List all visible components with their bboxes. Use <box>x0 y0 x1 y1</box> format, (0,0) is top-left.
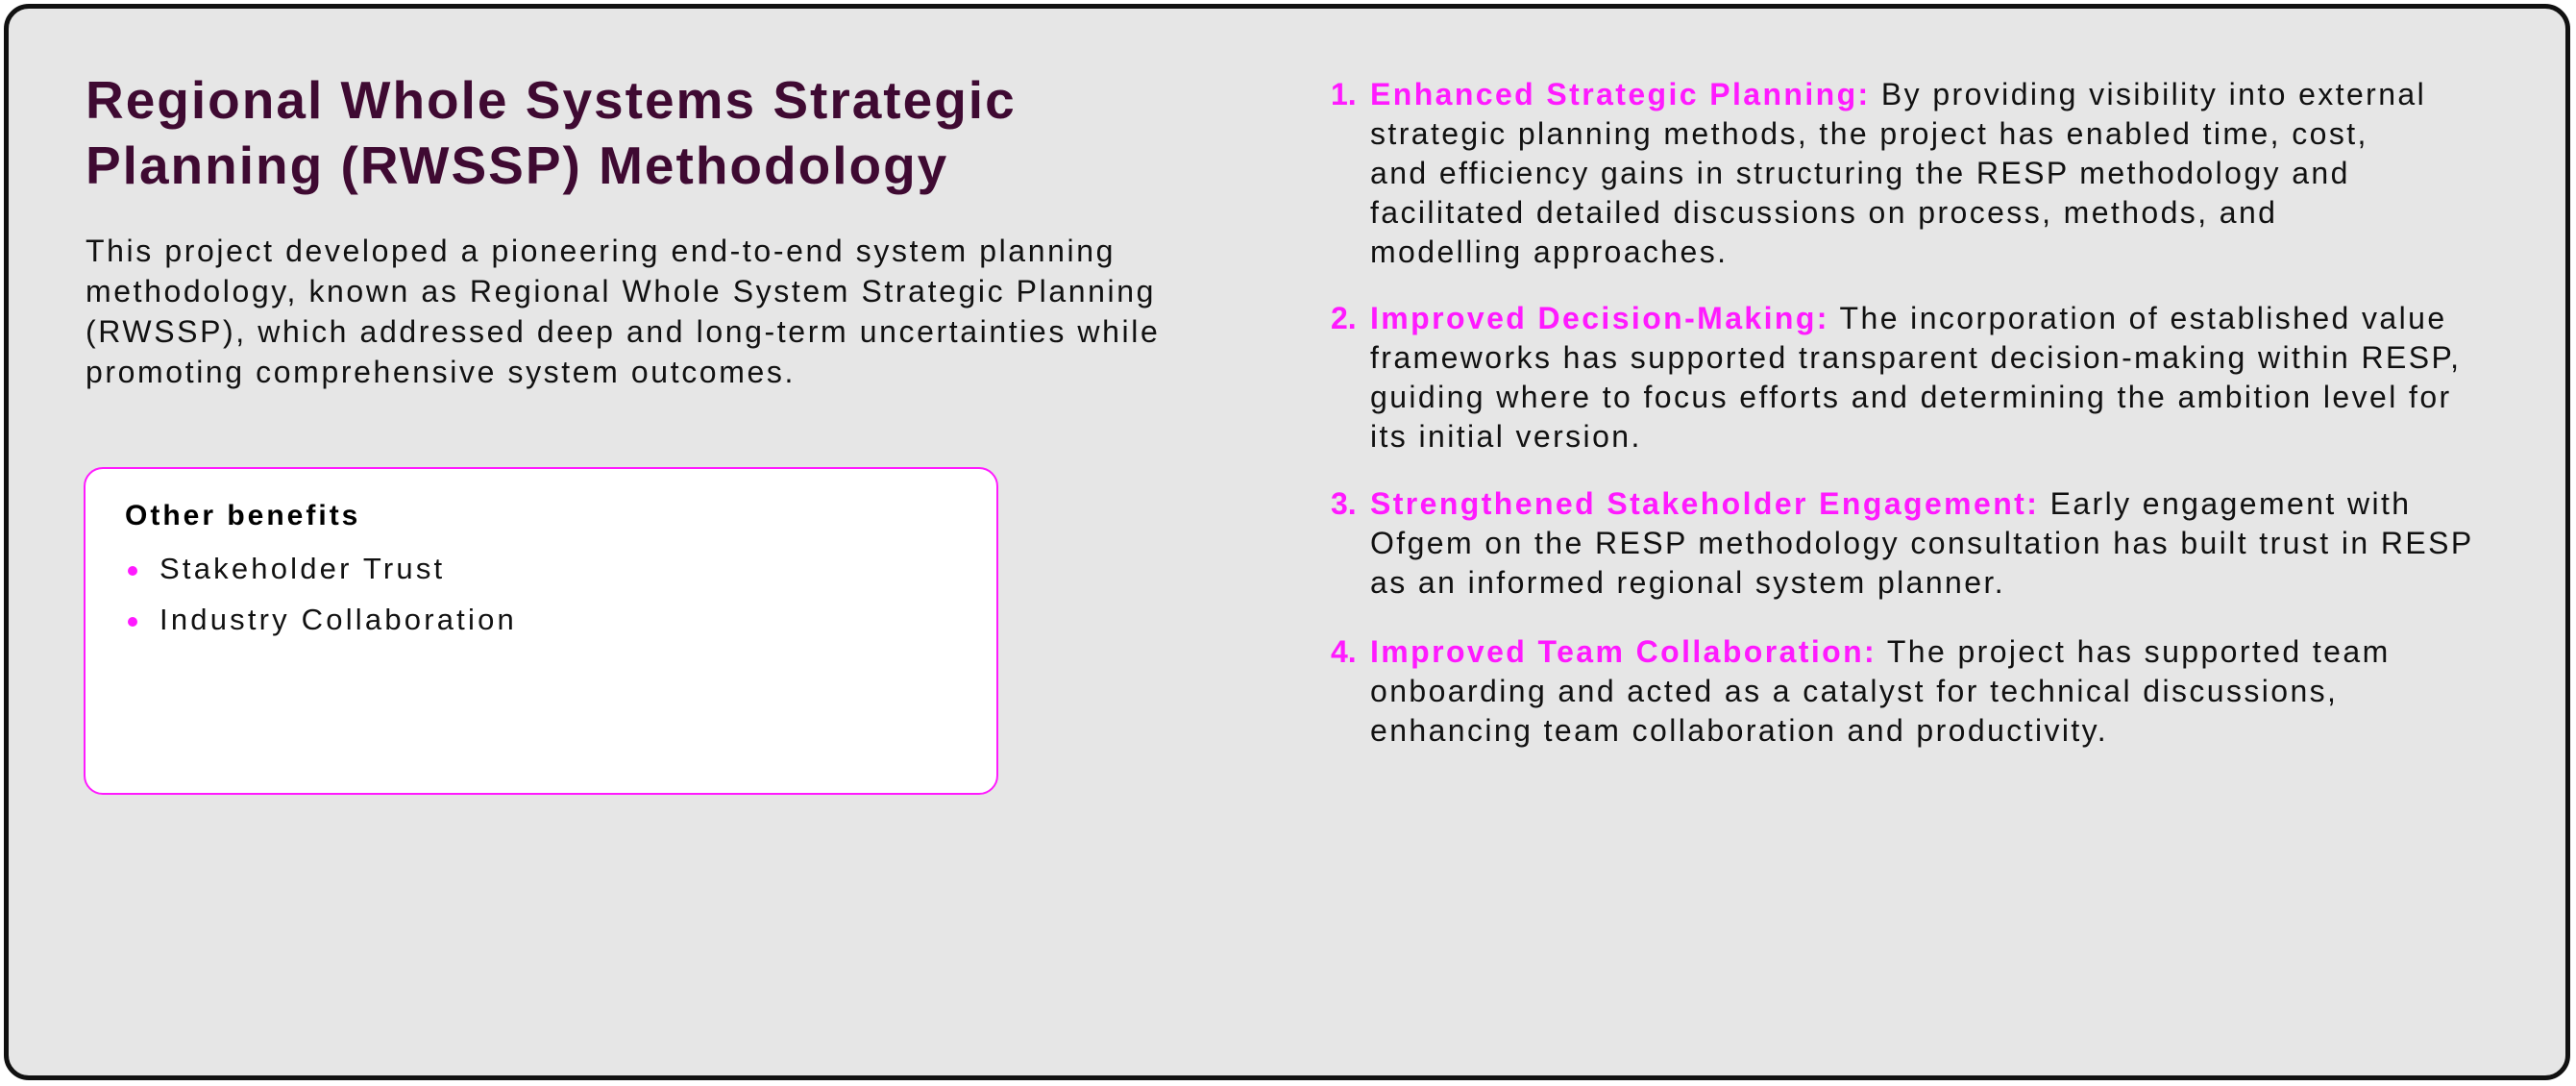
text block: intro: methodology, known as Regional Whole System Strategic Planning <box>86 274 1156 309</box>
list item 2: guiding where to focus efforts and determining the ambition level for <box>1370 380 2452 414</box>
bullet: industry collaboration <box>128 603 517 636</box>
list item 4: onboarding and acted as a catalyst for technical discussions, <box>1370 674 2338 708</box>
panel: other benefits <box>84 467 998 795</box>
list item 3: as an informed regional system planner. <box>1370 565 2005 600</box>
list item 4: enhancing team collaboration and productivity. <box>1370 713 2108 748</box>
text block: intro: promoting comprehensive system outcomes. <box>86 355 796 389</box>
text block: intro: (RWSSP), which addressed deep and long-term uncertainties while <box>86 314 1160 349</box>
list item 1: and efficiency gains in structuring the RESP methodology and <box>1370 156 2350 190</box>
list item 2: Improved Decision-Making: The incorporation of established value <box>1370 301 2447 335</box>
list item 2: its initial version. <box>1370 419 1642 454</box>
bullet: stakeholder trust <box>128 552 445 585</box>
text block: intro <box>86 234 1160 389</box>
panel: other benefits: Stakeholder Trust <box>159 552 445 585</box>
list item 1: strategic planning methods, the project has enabled time, cost, <box>1370 116 2368 151</box>
list item 3 <box>1331 486 2474 600</box>
list item 2: frameworks has supported transparent decision-making within RESP, <box>1370 340 2461 375</box>
heading: other benefits: Other benefits <box>125 500 360 531</box>
list item 4: Improved Team Collaboration: The project has supported team <box>1370 634 2391 669</box>
list item 4: 4. <box>1331 634 1357 669</box>
list item 1: Enhanced Strategic Planning: By providing visibility into external <box>1370 77 2426 111</box>
title: Planning (RWSSP) Methodology <box>86 136 948 195</box>
list item 2 <box>1331 301 2461 454</box>
list item 3: 3. <box>1331 486 1357 521</box>
list item 2: 2. <box>1331 301 1357 335</box>
list item 3: Ofgem on the RESP methodology consultation has built trust in RESP <box>1370 526 2474 560</box>
list item 4 <box>1331 634 2391 748</box>
list item 1: facilitated detailed discussions on process, methods, and <box>1370 195 2277 230</box>
list item 1: 1. <box>1331 77 1357 111</box>
panel: other benefits: Industry Collaboration <box>159 603 517 636</box>
title <box>86 70 1017 195</box>
list item 3: Strengthened Stakeholder Engagement: Early engagement with <box>1370 486 2412 521</box>
list item 1: modelling approaches. <box>1370 234 1728 269</box>
list item 1 <box>1331 77 2426 269</box>
title: Regional Whole Systems Strategic <box>86 70 1017 130</box>
text block: intro: This project developed a pioneering end-to-end system planning <box>86 234 1116 268</box>
